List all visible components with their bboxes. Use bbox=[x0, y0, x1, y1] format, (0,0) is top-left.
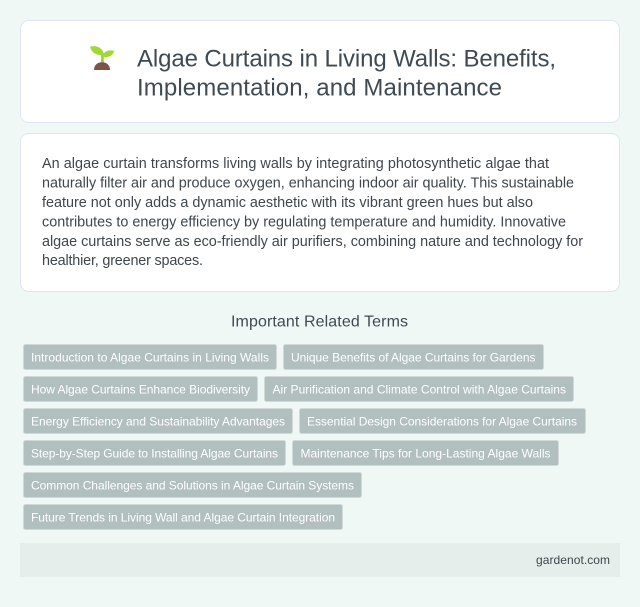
tag: air purification: Air Purification and Climate Control with Algae Curtains bbox=[272, 382, 566, 396]
title bbox=[137, 46, 556, 102]
tag: future trends: Future Trends in Living Wall and Algae Curtain Integration bbox=[31, 510, 335, 524]
text block: description: feature not only adds a dynamic aesthetic with its vibrant green hues but also bbox=[42, 195, 533, 211]
tag: energy efficiency: Energy Efficiency and Sustainability Advantages bbox=[31, 414, 285, 428]
panel: description card bbox=[20, 134, 620, 292]
tag: future trends bbox=[24, 504, 342, 530]
title: Implementation, and Maintenance bbox=[137, 74, 502, 102]
tag: maintenance tips: Maintenance Tips for Long-Lasting Algae Walls bbox=[300, 446, 550, 460]
tag list bbox=[24, 344, 586, 530]
text block: description: An algae curtain transforms living walls by integrating photosynthetic algae that bbox=[42, 156, 549, 172]
tag: biodiversity bbox=[24, 376, 258, 402]
tag: energy efficiency bbox=[24, 408, 292, 434]
title: Algae Curtains in Living Walls: Benefits, bbox=[137, 46, 556, 72]
tag: installing guide: Step-by-Step Guide to Installing Algae Curtains bbox=[31, 446, 278, 460]
footer bar bbox=[20, 543, 620, 577]
footer source: gardenot.com bbox=[536, 553, 610, 567]
tag: unique benefits: Unique Benefits of Algae Curtains for Gardens bbox=[291, 350, 536, 364]
tag: unique benefits bbox=[284, 344, 544, 370]
tag: installing guide bbox=[24, 440, 286, 466]
text block: description: contributes to energy efficiency by regulating temperature and humidity. Innovative bbox=[42, 214, 566, 230]
tag: air purification bbox=[264, 376, 574, 402]
tag: common challenges: Common Challenges and Solutions in Algae Curtain Systems bbox=[31, 478, 354, 492]
tag: introduction: Introduction to Algae Curtains in Living Walls bbox=[31, 350, 269, 364]
text block: description bbox=[42, 156, 583, 269]
panel: header card bbox=[20, 20, 620, 122]
text block: description: healthier, greener spaces. bbox=[42, 253, 203, 269]
text block: description: algae curtains serve as eco-friendly air purifiers, combining nature and technology for bbox=[42, 234, 583, 250]
tag: introduction bbox=[24, 344, 276, 370]
tag: common challenges bbox=[24, 472, 362, 498]
heading: important related terms: Important Related Terms bbox=[231, 314, 408, 330]
text block: description: naturally filter air and produce oxygen, enhancing indoor air quality. This sustainable bbox=[42, 176, 574, 192]
tag: maintenance tips bbox=[292, 440, 558, 466]
tag: design considerations: Essential Design Considerations for Algae Curtains bbox=[307, 414, 577, 428]
icon: seedling bbox=[90, 46, 114, 70]
tag: biodiversity: How Algae Curtains Enhance Biodiversity bbox=[31, 382, 250, 396]
tag: design considerations bbox=[300, 408, 586, 434]
